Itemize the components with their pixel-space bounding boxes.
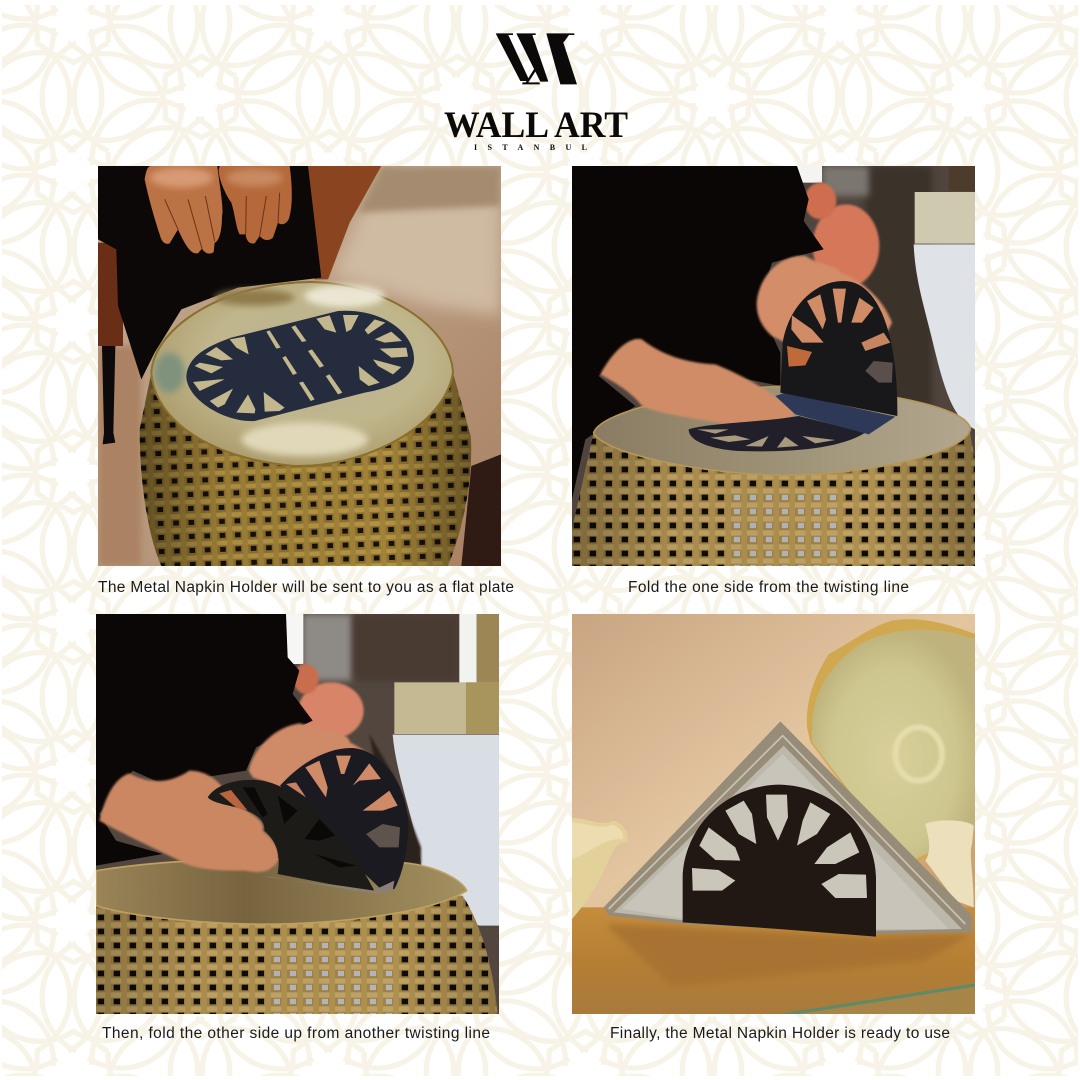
gravy boat <box>572 818 628 919</box>
panel: step 3 photo, folding other side <box>96 614 499 1014</box>
front half of holder <box>208 780 394 893</box>
napkin stack <box>604 721 972 934</box>
back hand <box>248 722 371 787</box>
panel: step 2 photo, folding one side <box>572 166 975 566</box>
folded side <box>780 281 897 416</box>
front hand <box>99 771 279 872</box>
panel: step 4 photo, finished holder with napkins <box>572 614 975 1014</box>
panel: step 1 photo, flat plate on stool <box>98 166 501 566</box>
caption: step 3: Then, fold the other side up from another twisting line <box>102 1025 490 1042</box>
logo: Wall Art Istanbul <box>444 33 628 152</box>
hinge <box>775 393 895 434</box>
sub-wordmark: ISTANBUL <box>474 143 587 152</box>
cushion <box>293 664 364 739</box>
stool body <box>140 373 471 566</box>
caption: step 1: The Metal Napkin Holder will be sent to you as a flat plate <box>98 579 514 596</box>
cushion <box>804 183 879 288</box>
hand on plate <box>600 339 794 425</box>
plate <box>807 619 975 867</box>
hands <box>145 166 292 254</box>
back half of holder <box>280 748 408 891</box>
table <box>572 907 975 1014</box>
flat half <box>689 416 865 451</box>
wordmark: WALL ART <box>444 105 628 146</box>
vase <box>914 192 975 429</box>
stool top <box>96 859 467 924</box>
metal holder <box>683 785 876 937</box>
icon: WA monogram <box>496 33 577 84</box>
caption: step 4: Finally, the Metal Napkin Holder is ready to use <box>610 1025 950 1042</box>
napkin holder flat plate <box>186 311 414 421</box>
stool body <box>572 426 975 566</box>
stool top <box>594 386 970 475</box>
stool top <box>151 282 453 466</box>
shaker <box>925 820 974 907</box>
sweater <box>96 614 313 866</box>
stool body <box>96 896 498 1014</box>
upper hand <box>757 256 892 343</box>
sweater <box>572 166 824 499</box>
caption: step 2: Fold the one side from the twisting line <box>628 579 909 596</box>
vase <box>393 682 499 926</box>
